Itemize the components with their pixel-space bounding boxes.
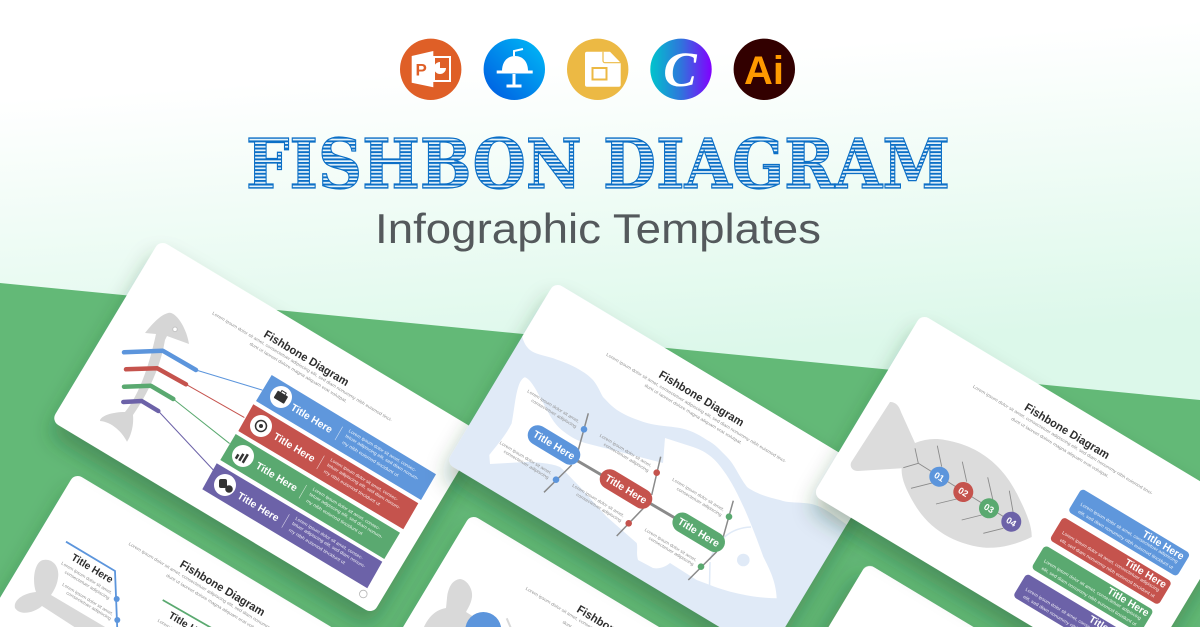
icon: bar chart bbox=[232, 445, 254, 467]
node 04: 04 bbox=[1004, 515, 1018, 529]
row text: my nibh euismod tincidunt ut bbox=[288, 527, 347, 566]
row: red bbox=[238, 404, 418, 529]
page number bbox=[360, 590, 367, 598]
top white wave bbox=[522, 285, 851, 525]
blue branch captions: Lorem ipsum dolor sit amet, bbox=[61, 582, 114, 616]
node 04 bbox=[998, 508, 1025, 535]
panel: fish skeleton slide bbox=[51, 240, 481, 614]
description: Lorem ipsum dolor sit amet, consectetuer adipiscing elit, sed diam nonummy nibh euismod tinci- bbox=[211, 311, 394, 423]
row text: tetuer adipiscing elit, sed diam nonum- bbox=[344, 433, 420, 481]
white fish silhouette bbox=[489, 377, 777, 598]
card title: Title Here bbox=[1122, 557, 1168, 591]
captions: consectetuer adipiscing bbox=[603, 442, 650, 473]
row text: Lorem ipsum dolor sit amet, consec- bbox=[294, 516, 364, 561]
captions: Lorem ipsum dolor sit amet, bbox=[499, 440, 553, 475]
description: dunt ut laoreet dolore magna aliquam erat volutpat. bbox=[1010, 416, 1110, 479]
fish tail bbox=[420, 579, 482, 627]
row title: Title Here bbox=[235, 491, 281, 524]
captions: Lorem ipsum dolor sit amet, bbox=[599, 433, 653, 468]
row text: my nibh euismod tincidunt ut bbox=[323, 469, 382, 507]
card: blue bbox=[1068, 488, 1191, 577]
panel: blue fish slide bbox=[446, 282, 890, 627]
heading: Fishbone Diagram bbox=[1022, 402, 1111, 462]
rib dots bbox=[553, 426, 732, 570]
card text: elit, sed diam nonummy nibh euismod tincidunt ut bbox=[1041, 566, 1138, 627]
blue branch bbox=[66, 542, 120, 627]
icon: Keynote bbox=[484, 39, 545, 100]
blue branch captions: consectetuer adipiscing bbox=[64, 570, 111, 601]
pill: green bbox=[669, 509, 729, 556]
captions: consectetuer adipiscing bbox=[530, 398, 578, 429]
row: purple bbox=[202, 463, 382, 588]
card text: Lorem ipsum dolor sit amet, consectetuer adipiscing bbox=[1043, 558, 1143, 621]
icon: blue circle bbox=[465, 612, 501, 627]
card text: elit, sed diam nonummy nibh euismod tincidunt ut bbox=[1059, 538, 1156, 599]
captions: consectetuer adipiscing bbox=[575, 492, 623, 523]
node 01: 01 bbox=[932, 470, 946, 484]
node 02: 02 bbox=[956, 485, 970, 499]
panel: bottom-right slide bbox=[758, 563, 1188, 627]
card: green bbox=[1031, 545, 1154, 627]
row: blue bbox=[256, 375, 436, 500]
fish bones bbox=[903, 446, 1013, 533]
fish tail and spine bbox=[15, 560, 122, 627]
blue branch captions bbox=[60, 561, 114, 621]
captions: consectetuer adipiscing bbox=[676, 486, 723, 518]
card title: Title Here bbox=[1105, 586, 1151, 619]
panel: bottom-left slide bbox=[0, 473, 396, 627]
row text: my nibh euismod tincidunt ut bbox=[341, 440, 400, 478]
captions: consectetuer adipiscing bbox=[648, 536, 695, 567]
icon: PowerPoint: P bbox=[416, 60, 427, 80]
description: Lorem ipsum dolor sit amet, consectetuer adipiscing elit, sed diam nonummy nibh euismod tinci- bbox=[972, 384, 1154, 496]
captions: Lorem ipsum dolor sit amet, bbox=[671, 477, 725, 512]
green branch bbox=[163, 600, 215, 627]
icon: Adobe Illustrator bbox=[734, 39, 795, 100]
row text: my nibh euismod tincidunt ut bbox=[305, 498, 364, 536]
green diagonal band bbox=[0, 283, 1200, 627]
row text: Lorem ipsum dolor sit amet, consec- bbox=[329, 457, 399, 502]
panel: bottom-center slide bbox=[362, 514, 792, 627]
card text: Lorem ipsum dolor sit amet, consectetuer adipiscing bbox=[1080, 502, 1179, 564]
row title: Title Here bbox=[271, 431, 317, 465]
rib bbox=[507, 618, 512, 627]
icon: Canva: C bbox=[663, 41, 697, 97]
node 01 bbox=[926, 463, 953, 490]
grey fish bbox=[851, 402, 1032, 548]
description: dunt ut laoreet dolore magna aliquam erat volutpat. bbox=[165, 573, 265, 627]
pill: blue bbox=[524, 421, 584, 469]
captions: Lorem ipsum dolor sit amet, bbox=[526, 389, 580, 424]
pill: red: Title Here bbox=[603, 473, 649, 507]
subtitle: Infographic Templates bbox=[375, 205, 821, 252]
row text: tetuer adipiscing elit, sed diam nonum- bbox=[326, 462, 402, 510]
captions: consectetuer adipiscing bbox=[503, 449, 550, 480]
card text: Lorem ipsum dolor sit amet, consectetuer adipiscing bbox=[1061, 530, 1161, 593]
row: green bbox=[220, 434, 400, 559]
panel: grey fish slide bbox=[813, 314, 1200, 627]
node 03 bbox=[975, 495, 1003, 522]
row of software icons bbox=[400, 39, 795, 100]
icon: Canva bbox=[650, 39, 712, 100]
icon: coins bbox=[214, 474, 236, 496]
card: purple bbox=[1013, 573, 1136, 627]
row title: Title Here bbox=[288, 402, 334, 436]
pill: green: Title Here bbox=[675, 516, 721, 550]
icon: Adobe Illustrator: Ai bbox=[744, 49, 784, 93]
heading: Fishbone Diagram bbox=[656, 369, 746, 429]
fish skeleton bbox=[100, 313, 189, 442]
pill: blue: Title Here bbox=[531, 429, 577, 463]
row title: Title Here bbox=[253, 461, 299, 494]
card text: elit, sed diam nonummy nibh euismod tincidunt ut bbox=[1077, 509, 1175, 570]
description: dunt ut laoreet dolore magna aliquam erat volutpat. bbox=[644, 383, 743, 445]
icon: PowerPoint bbox=[400, 39, 461, 100]
description: Lorem ipsum dolor sit amet, consectetuer adipiscing elit, sed diam nonummy nibh euismod tinci- bbox=[605, 352, 788, 464]
colored bones bbox=[123, 351, 262, 470]
title: FISHBON DIAGRAM bbox=[246, 125, 950, 205]
card title: Title Here bbox=[1140, 529, 1186, 563]
description: dunt ut laoreet dolore magna aliquam erat volutpat. bbox=[249, 341, 348, 404]
row text: Lorem ipsum dolor sit amet, consec- bbox=[312, 487, 382, 531]
node 02 bbox=[950, 478, 977, 506]
spine bbox=[576, 460, 675, 518]
card: red bbox=[1049, 517, 1172, 605]
row text: tetuer adipiscing elit, sed diam nonum- bbox=[291, 521, 367, 569]
icon: briefcase bbox=[270, 386, 292, 408]
pill: red bbox=[596, 465, 656, 513]
blue branch title: Title Here bbox=[69, 552, 115, 586]
row text: tetuer adipiscing elit, sed diam nonum- bbox=[308, 492, 384, 540]
heading: Fishbone Diagram bbox=[261, 329, 351, 389]
captions bbox=[499, 389, 725, 567]
icon: target bbox=[250, 415, 272, 437]
captions: Lorem ipsum dolor sit amet, bbox=[571, 483, 625, 518]
row text: Lorem ipsum dolor sit amet, consec- bbox=[348, 428, 418, 473]
blue branch captions: Lorem ipsum dolor sit amet, bbox=[60, 561, 113, 595]
blue branch captions: consectetuer adipiscing bbox=[65, 590, 113, 621]
heading: Fishbone Diagram bbox=[177, 559, 267, 619]
captions: Lorem ipsum dolor sit amet, bbox=[644, 527, 698, 562]
node 03: 03 bbox=[982, 502, 996, 515]
fish gill and eye bbox=[710, 527, 751, 586]
icon: Google Slides bbox=[567, 39, 628, 100]
ribs bbox=[544, 413, 733, 580]
